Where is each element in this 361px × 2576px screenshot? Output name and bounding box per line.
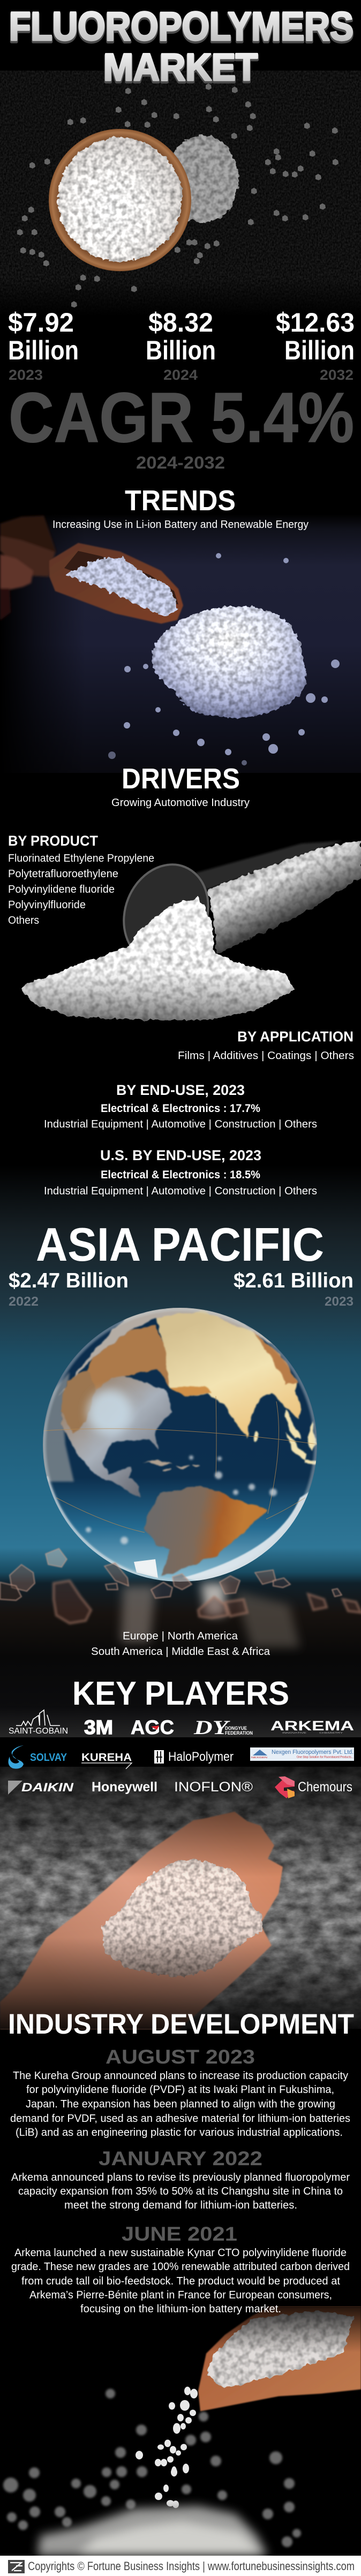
- entry: August 2023: (LiB) and as an engineering plastic for various industrial applications.: [16, 2127, 343, 2138]
- stat: asia pacific 2023: [234, 1269, 354, 1309]
- falling pellets: [136, 2387, 198, 2508]
- illustration: glass globe: [42, 1303, 317, 1647]
- scattered crystals: [108, 553, 340, 765]
- blurred pellet pile: [37, 2506, 268, 2556]
- left glass strip: [42, 1372, 74, 1482]
- logo: Daikin: DAIKIN: [21, 1781, 74, 1794]
- hand: [198, 2307, 361, 2411]
- hand holding scoop: [0, 516, 56, 620]
- panel: trends scoop photo: [0, 514, 361, 773]
- continent highlight: [87, 1390, 132, 1435]
- stat: asia pacific 2022: [9, 1269, 129, 1309]
- logo: Kureha: KUREHA: [81, 1752, 132, 1764]
- wooden scoop: [49, 543, 183, 624]
- entry: June 2021: [11, 2223, 350, 2315]
- panel: by end-use 2023: BY END-USE, 2023: [116, 1082, 245, 1098]
- stat: 2023 market size: [8, 308, 79, 383]
- entry: August 2023: demand for PVDF, used as an adhesive material for lithium-ion batteries: [10, 2113, 350, 2125]
- stat: 2024 market size: [146, 308, 216, 383]
- stat: asia pacific 2023: 2023: [325, 1294, 354, 1309]
- logo: Nexgen Fluoropolymers: NEXGEN: [251, 1756, 267, 1759]
- text: other regions: South America | Middle East & Africa: [91, 1646, 270, 1658]
- photo: spilled test tube of pellets: [22, 840, 361, 1020]
- panel: asia pacific background: [0, 1165, 361, 1712]
- panel: by product: [8, 833, 154, 926]
- heading: drivers: DRIVERS: [122, 763, 240, 795]
- hand: [0, 1812, 283, 2029]
- trends subtitle: Increasing Use in Li-ion Battery and Renewable Energy: [52, 519, 309, 531]
- polar cap: [59, 1308, 277, 1395]
- entry: August 2023: The Kureha Group announced plans to increase its production capacity: [13, 2070, 348, 2082]
- stat: 2023 market size: $7.92: [8, 308, 74, 338]
- north america and europe landmass: [60, 1373, 172, 1498]
- entry: January 2022: Arkema announced plans to revise its previously planned fluoropolymer: [11, 2172, 350, 2183]
- logo: Saint-Gobain: SAINT-GOBAIN: [9, 1727, 68, 1736]
- logo: Chemours: [275, 1776, 352, 1798]
- tube pellets: [207, 840, 361, 954]
- salt in bowl: [58, 137, 182, 262]
- caribbean islands: [142, 1458, 200, 1471]
- stat: asia pacific 2023: $2.61 Billion: [234, 1269, 354, 1292]
- photo: hand pouring pellets: [3, 2307, 361, 2556]
- heading: key players: KEY PLAYERS: [72, 1675, 289, 1712]
- entry: August 2023: Japan. The expansion has been planned to align with the growing: [26, 2098, 335, 2110]
- entry: January 2022: JANUARY 2022: [99, 2148, 262, 2169]
- panel: U.S. by end-use 2023: Electrical & Electronics : 18.5%: [101, 1169, 260, 1181]
- logo: Arkema: CHEMISTRY: [319, 1731, 343, 1734]
- panel: by end-use 2023: Industrial Equipment | Automotive | Construction | Others: [44, 1118, 317, 1130]
- entry: August 2023: [10, 2046, 350, 2138]
- hand photo background: [0, 1767, 361, 2029]
- entry: January 2022: capacity expansion from 35% to 50% at its Changshu site in China to: [18, 2186, 343, 2197]
- logo: Dongyue Federation: DY: [193, 1717, 230, 1739]
- tube glass: [184, 841, 343, 890]
- top shadow on hand: [193, 2307, 361, 2352]
- logo: Arkema: ARKEMA: [270, 1719, 354, 1734]
- logo: Arkema: INNOVATIVE: [282, 1731, 306, 1734]
- footer band: [0, 2556, 361, 2576]
- continents: [59, 1303, 317, 1577]
- title: MARKET: [103, 48, 258, 90]
- panel: U.S. by end-use 2023: Industrial Equipment | Automotive | Construction | Others: [44, 1185, 317, 1197]
- spilled salt behind bowl: [166, 135, 239, 223]
- panel: by application: BY APPLICATION: [237, 1029, 354, 1045]
- logo: Honeywell: Honeywell: [92, 1780, 157, 1795]
- entry: June 2021: Arkema’s Pierre-Bénite plant in France for European consumers,: [29, 2289, 332, 2301]
- logo: 3M: 3M: [84, 1716, 113, 1738]
- pellets in hand: [206, 2311, 354, 2388]
- entry: June 2021: JUNE 2021: [122, 2223, 237, 2245]
- panel: by end-use 2023: Electrical & Electronics : 17.7%: [101, 1102, 260, 1115]
- panel: hero salt bowl photo: [0, 71, 361, 317]
- panel: by application: [178, 1029, 354, 1062]
- entry: January 2022: meet the strong demand for lithium-ion batteries.: [64, 2199, 297, 2211]
- logo: Dongyue Federation: [193, 1717, 253, 1739]
- entry: June 2021: Arkema launched a new sustainable Kynar CTO polyvinylidene fluoride: [14, 2247, 347, 2259]
- panel: U.S. by end-use 2023: [44, 1147, 317, 1197]
- lower glass highlight: [183, 1491, 309, 1581]
- panel: by application: Films | Additives | Coatings | Others: [178, 1050, 354, 1062]
- out-of-focus pellets: [3, 2389, 301, 2547]
- entry: June 2021: grade. These new grades are 100% renewable attributed carbon derived: [11, 2261, 350, 2273]
- logo: Nexgen Fluoropolymers: Nexgen Fluoropolymers Pvt. Ltd.: [272, 1749, 354, 1755]
- logo: Solvay: [9, 1745, 67, 1769]
- wooden bowl: [49, 129, 191, 271]
- floor reflection: [121, 1583, 300, 1647]
- glass mouth: [109, 852, 223, 976]
- logo: Saint-Gobain: [9, 1710, 68, 1736]
- entry: August 2023: for polyvinylidene fluoride (PVDF) at its Iwaki Plant in Fukushima,: [26, 2084, 334, 2096]
- heading: drivers: [0, 763, 361, 837]
- logo: Daikin: [8, 1781, 74, 1795]
- heading: trends: TRENDS: [125, 485, 236, 517]
- logo: Solvay: SOLVAY: [30, 1752, 67, 1764]
- heading: drivers: Growing Automotive Industry: [111, 797, 250, 809]
- stat: 2024 market size: 2024: [163, 367, 198, 383]
- loose salt crystals: [17, 83, 339, 308]
- panel: by product: Polytetrafluoroethylene: [8, 868, 118, 880]
- eurasia: [86, 1324, 170, 1390]
- panel: key players background: [0, 1706, 361, 2029]
- stat: 2032 market size: [276, 308, 355, 383]
- decoration: ice crystals: [0, 1548, 342, 1600]
- stat: 2024 market size: $8.32: [148, 308, 213, 338]
- logo: HaloPolymer: HaloPolymer: [168, 1750, 234, 1764]
- logo: Dongyue Federation: FEDERATION: [225, 1730, 253, 1736]
- logo: Dongyue Federation: DONGYUE: [225, 1726, 247, 1731]
- panel: by product: BY PRODUCT: [8, 833, 98, 849]
- salt in scoop: [66, 557, 178, 617]
- stat: asia pacific 2022: $2.47 Billion: [9, 1269, 129, 1292]
- logo: Chemours: Chemours: [298, 1780, 352, 1795]
- logo: AGC: AGC: [131, 1716, 174, 1738]
- logo: Inoflon: INOFLON®: [174, 1780, 253, 1795]
- title: MARKET: [103, 47, 258, 89]
- stat: 2024 market size: Billion: [146, 335, 216, 365]
- glass edge glow: [44, 1309, 316, 1581]
- CAGR callout: 2024-2032: [136, 453, 225, 472]
- panel: by end-use 2023: [44, 1082, 317, 1130]
- logo: Nexgen Fluoropolymers: One Stop Solution for Fluorobased Products...: [297, 1755, 354, 1759]
- salt pile: [151, 606, 306, 718]
- text: other regions: Europe | North America: [123, 1630, 238, 1642]
- logo: Fortune Business Insights: [8, 2560, 25, 2573]
- text: other regions: [91, 1630, 270, 1658]
- logo: Arkema: [270, 1719, 354, 1734]
- stat: 2023 market size: 2023: [9, 367, 43, 383]
- stat: 2032 market size: 2032: [320, 367, 354, 383]
- logo: Kureha: [81, 1752, 132, 1769]
- entry: January 2022: [11, 2148, 350, 2211]
- panel: by product: Polyvinylfluoride: [8, 899, 86, 911]
- stat: 2023 market size: Billion: [8, 335, 79, 365]
- panel: U.S. by end-use 2023: U.S. BY END-USE, 2023: [100, 1147, 261, 1163]
- entry: August 2023: AUGUST 2023: [106, 2046, 255, 2068]
- globe grid lines: [43, 1396, 317, 1532]
- logo: Nexgen Fluoropolymers: [250, 1747, 354, 1761]
- city-light bokeh: [86, 1455, 277, 1544]
- fade band under stats: [0, 316, 361, 516]
- pellet pile: [22, 897, 295, 1020]
- panel: by product: Polyvinylidene fluoride: [8, 884, 115, 895]
- south america: [143, 1485, 266, 1577]
- entry: June 2021: from crude tall oil bio-feedstock. The product would be produced at: [21, 2275, 340, 2287]
- stat: asia pacific 2022: 2022: [9, 1294, 39, 1309]
- southeast asia islands: [252, 1408, 317, 1465]
- stat: 2032 market size: $12.63: [276, 308, 355, 338]
- salt in palm: [102, 1859, 262, 1977]
- entry: June 2021: focusing on the lithium-ion battery market.: [80, 2303, 281, 2315]
- title: [9, 4, 354, 90]
- heading: asia pacific: ASIA PACIFIC: [36, 1218, 324, 1271]
- panel: by product: Others: [8, 915, 39, 926]
- panel: industry development: [8, 2008, 354, 2315]
- panel: by product: Fluorinated Ethylene Propylene: [8, 853, 154, 864]
